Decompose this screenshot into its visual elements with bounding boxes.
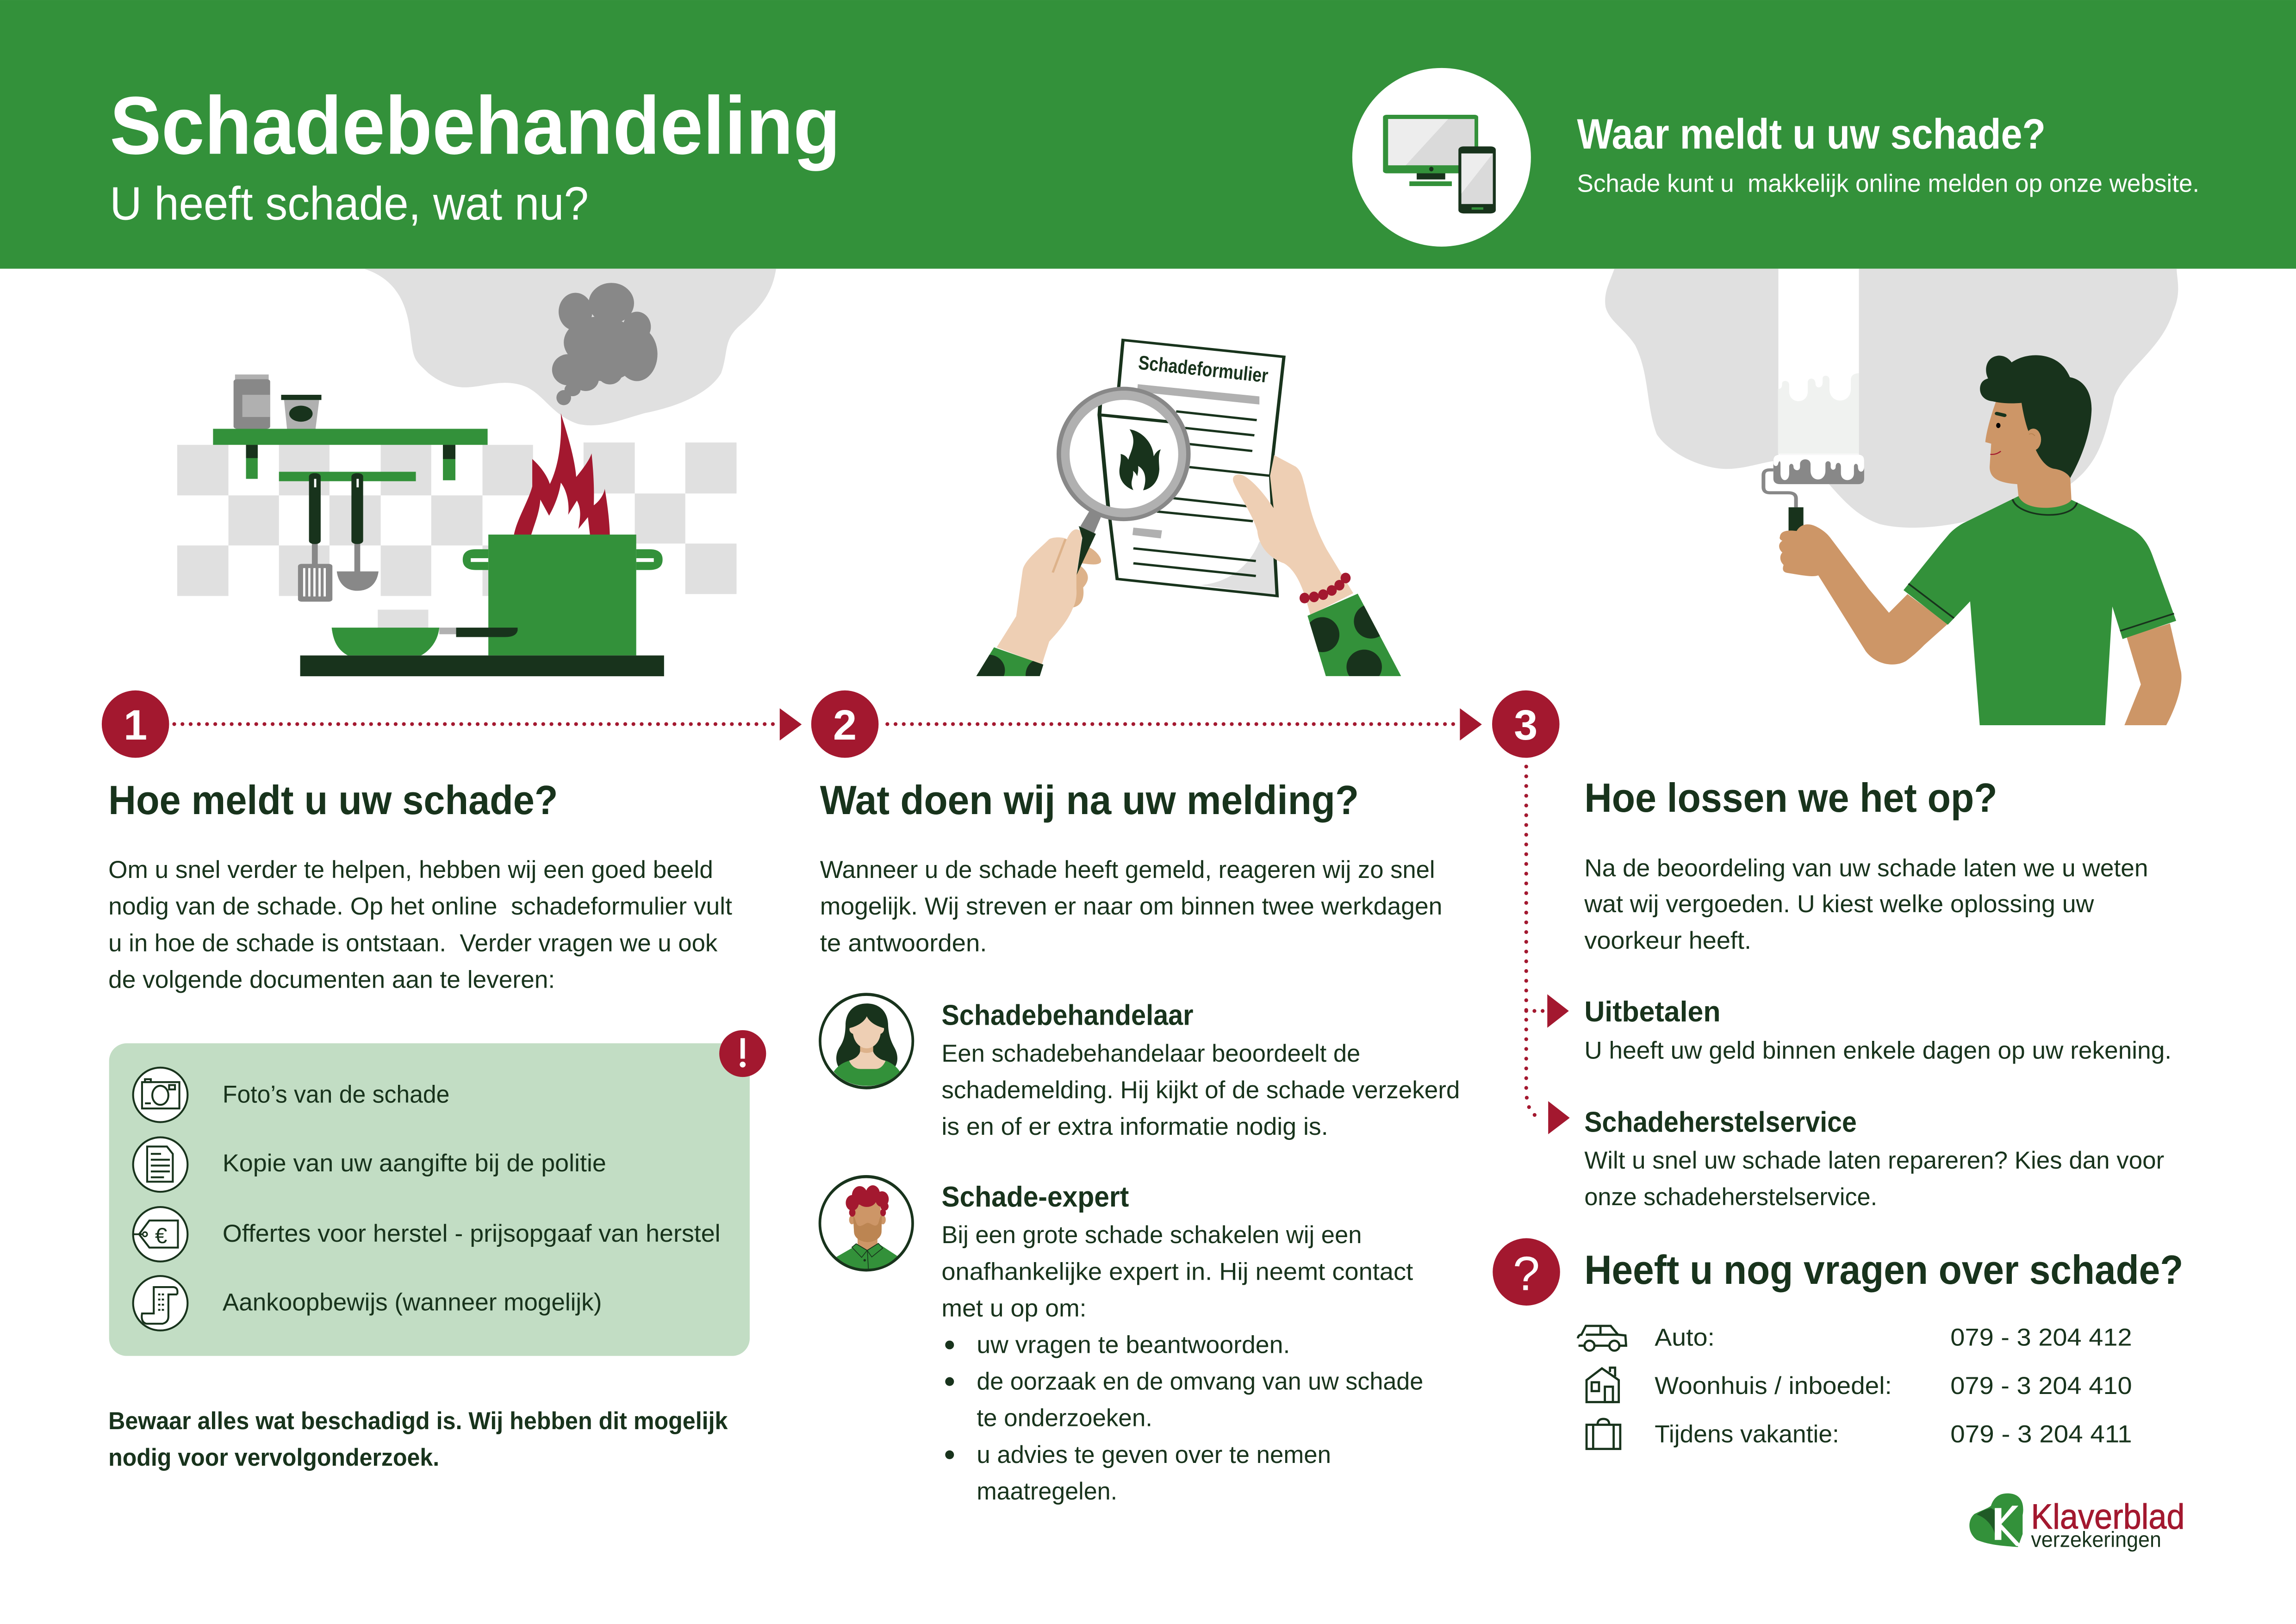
icon: damage expert avatar [820, 1176, 913, 1270]
intro text: Om u snel verder te helpen, hebben wij een goed beeld [108, 856, 713, 884]
role: claims handler: is en of er extra informatie nodig is. [941, 1113, 1328, 1140]
icon: flame on form [1120, 429, 1161, 490]
paint roller [1763, 454, 1864, 533]
arrow to step 3 [1460, 708, 1482, 740]
role: claims handler [941, 1000, 1460, 1140]
step badge 3: 3 [1514, 702, 1537, 749]
step badge 3 [1492, 691, 1560, 758]
hanging utensils [279, 472, 416, 602]
arrow to step 2 [780, 708, 802, 740]
contact row: car [1578, 1324, 2132, 1351]
online reporting heading: Waar meldt u uw schade? [1577, 111, 2046, 158]
item: photos: Foto’s van de schade [223, 1081, 449, 1108]
dark smoke cloud [552, 283, 658, 405]
smoke background [364, 269, 776, 425]
column 2: what we do [820, 777, 1460, 1505]
contact row: car: 079 - 3 204 412 [1950, 1324, 2132, 1351]
step badge 2 [811, 691, 878, 758]
wet paint strip [1778, 373, 1859, 454]
intro text [108, 856, 732, 993]
contact row: home: Woonhuis / inboedel: [1655, 1372, 1892, 1400]
option: payout: Uitbetalen [1584, 996, 1721, 1028]
icon: claims handler avatar [820, 995, 913, 1088]
intro text: u in hoe de schade is ontstaan. Verder vragen we u ook [108, 929, 718, 957]
flames [514, 413, 610, 538]
role: damage expert: maatregelen. [977, 1478, 1117, 1505]
option: payout: U heeft uw geld binnen enkele dagen op uw rekening. [1584, 1037, 2172, 1064]
role: damage expert: uw vragen te beantwoorden. [977, 1331, 1290, 1358]
heading: Hoe meldt u uw schade? [108, 777, 558, 823]
column 3: how we solve it [1493, 775, 2183, 1449]
step badge 2: 2 [833, 702, 857, 749]
intro text: te antwoorden. [820, 929, 987, 957]
frying pan [332, 628, 517, 655]
illustration: inspecting claim form [972, 340, 1401, 691]
illustration: painting the wall [1605, 269, 2181, 725]
icon: price tag [133, 1207, 187, 1262]
illustration: kitchen fire [177, 269, 776, 676]
intro text: mogelijk. Wij streven er naar om binnen twee werkdagen [820, 893, 1442, 920]
option: repair service: Schadeherstelservice [1584, 1107, 1857, 1139]
intro text: wat wij vergoeden. U kiest welke oplossing uw [1584, 890, 2094, 918]
item: quotes: Offertes voor herstel - prijsopgaaf van herstel [223, 1220, 721, 1247]
logo leaf [1969, 1493, 2023, 1547]
arrow to Uitbetalen [1547, 994, 1569, 1028]
wall damage area [1605, 269, 2178, 528]
wall tiles [177, 442, 736, 631]
icon: suitcase [1587, 1419, 1620, 1449]
option: payout [1584, 996, 2172, 1064]
contact row: holiday [1587, 1419, 2132, 1449]
claim form paper [1100, 340, 1284, 596]
cooking pot [463, 535, 663, 655]
intro text: Wanneer u de schade heeft gemeld, reageren wij zo snel [820, 856, 1435, 884]
role: damage expert: te onderzoeken. [977, 1405, 1152, 1432]
right hand [1233, 455, 1401, 684]
icon: car [1578, 1326, 1626, 1350]
icon: receipt [133, 1276, 187, 1331]
logo wordmark: Klaverblad [2031, 1497, 2185, 1537]
heading: Hoe lossen we het op? [1584, 775, 1997, 821]
contact row: holiday: 079 - 3 204 411 [1950, 1420, 2132, 1448]
online reporting text: Schade kunt u makkelijk online melden op onze website. [1577, 169, 2199, 197]
note: keep damaged items: nodig voor vervolgonderzoek. [108, 1444, 439, 1471]
icon: price tag: € [155, 1224, 167, 1248]
role: damage expert: onafhankelijke expert in. Hij neemt contact [941, 1258, 1413, 1285]
icon: alert badge [719, 1030, 766, 1077]
person painting [1779, 355, 2181, 725]
icon: camera [133, 1068, 187, 1122]
role: damage expert: Bij een grote schade schakelen wij een [941, 1221, 1362, 1249]
note: keep damaged items [108, 1407, 728, 1471]
contact row: car: Auto: [1655, 1324, 1715, 1351]
panel: documents checklist [109, 1030, 766, 1356]
logo: Klaverblad verzekeringen [1969, 1493, 2185, 1552]
header band [0, 0, 2296, 269]
left hand [977, 526, 1101, 676]
contact row: holiday: Tijdens vakantie: [1655, 1420, 1839, 1448]
intro text: Na de beoordeling van uw schade laten we u weten [1584, 854, 2148, 882]
step badge 1: 1 [124, 702, 147, 749]
process flow: dotted connectors [174, 708, 1570, 1134]
arrow to Schadeherstelservice [1548, 1101, 1570, 1134]
intro text: nodig van de schade. Op het online schadeformulier vult [108, 893, 732, 920]
icon: house [1587, 1368, 1619, 1402]
column 1: how to report [108, 777, 766, 1471]
role: claims handler: Een schadebehandelaar beoordeelt de [941, 1040, 1360, 1067]
intro text [1584, 854, 2148, 954]
role: damage expert: u advies te geven over te nemen [977, 1441, 1331, 1468]
item: police report: Kopie van uw aangifte bij de politie [223, 1150, 606, 1177]
item: proof of purchase: Aankoopbewijs (wanneer mogelijk) [223, 1289, 602, 1316]
intro text: de volgende documenten aan te leveren: [108, 966, 555, 993]
form title: Schadeformulier [1137, 352, 1269, 387]
intro text [820, 856, 1442, 957]
option: repair service [1584, 1107, 2164, 1211]
shelf with jars [213, 374, 488, 480]
icon: monitor and phone [1352, 68, 1531, 247]
contact row: home: 079 - 3 204 410 [1950, 1372, 2132, 1400]
role: damage expert [941, 1181, 1423, 1505]
intro text: voorkeur heeft. [1584, 927, 1751, 954]
icon: question badge: ? [1513, 1246, 1540, 1300]
contact row: home [1587, 1368, 2132, 1402]
option: repair service: onze schadeherstelservice. [1584, 1183, 1877, 1211]
heading: Wat doen wij na uw melding? [820, 777, 1359, 823]
contact heading: Heeft u nog vragen over schade? [1584, 1247, 2183, 1293]
role: claims handler: Schadebehandelaar [941, 1000, 1194, 1032]
stove [300, 655, 664, 676]
role: damage expert: met u op om: [941, 1294, 1087, 1322]
step badge 1 [102, 691, 169, 758]
option: repair service: Wilt u snel uw schade laten repareren? Kies dan voor [1584, 1147, 2164, 1174]
icon: document [133, 1137, 187, 1192]
role: damage expert: de oorzaak en de omvang van uw schade [977, 1368, 1423, 1395]
magnifying glass [1057, 387, 1191, 535]
logo tagline: verzekeringen [2031, 1528, 2161, 1552]
subtitle: U heeft schade, wat nu? [110, 178, 589, 230]
role: claims handler: schademelding. Hij kijkt of de schade verzekerd [941, 1076, 1460, 1104]
note: keep damaged items: Bewaar alles wat beschadigd is. Wij hebben dit mogelijk [108, 1407, 728, 1435]
title: Schadebehandeling [110, 80, 840, 171]
icon: question badge [1493, 1238, 1560, 1306]
role: damage expert: Schade-expert [941, 1181, 1129, 1213]
